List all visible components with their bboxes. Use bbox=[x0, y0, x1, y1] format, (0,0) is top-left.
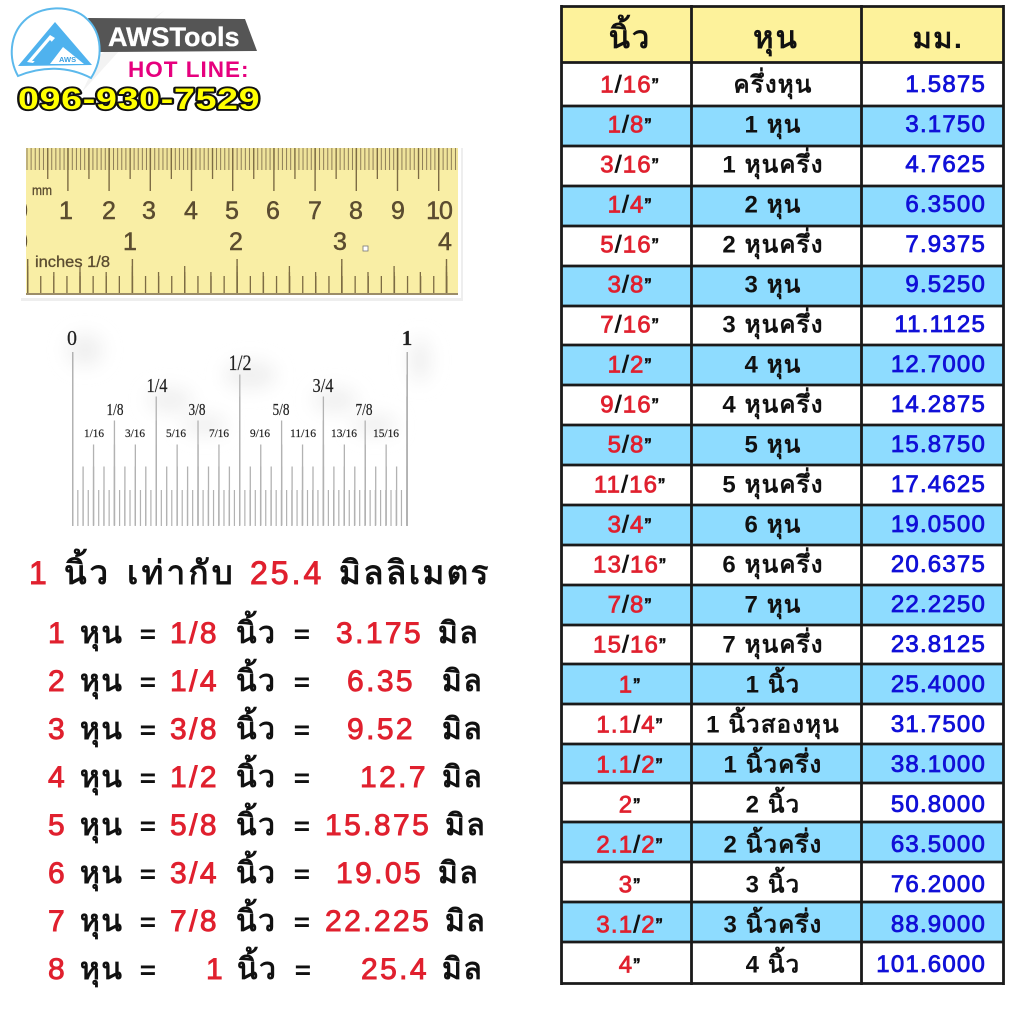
conversion: 7 hun: นิ้ว bbox=[236, 898, 277, 938]
row 7/16: 3 หุนครึ่ง bbox=[722, 306, 824, 340]
row 3 inch: 3 นิ้ว bbox=[746, 866, 800, 898]
conversion: 4 hun: มิล bbox=[442, 761, 483, 794]
row 5/8 bbox=[608, 431, 986, 460]
row 13/16: 13/16” bbox=[593, 552, 667, 578]
conversion: 6 hun bbox=[48, 850, 479, 892]
conversion: 8 hun: นิ้ว bbox=[237, 946, 278, 986]
fraction labels: 3/8 bbox=[188, 400, 206, 419]
row 1/8: 1/8” bbox=[608, 112, 652, 138]
row 7/8: 7/8” bbox=[608, 592, 652, 618]
row 11/16 bbox=[594, 466, 986, 500]
row 2 inch: 2” bbox=[619, 792, 641, 818]
row 15/16: 23.8125 bbox=[891, 631, 986, 658]
logo triangle mark bbox=[18, 22, 92, 66]
row 2.1/2: 2.1/2” bbox=[596, 832, 664, 858]
conversion: 3 hun: 3/8 bbox=[170, 713, 219, 746]
row 3/4: 6 หุน bbox=[744, 512, 802, 540]
heading: one inch equals 25.4 mm: นิ้ว bbox=[64, 548, 111, 591]
64th ticks bbox=[72, 490, 408, 526]
row 3/16: 3/16” bbox=[600, 152, 660, 178]
row 13/16: 6 หุนครึ่ง bbox=[722, 546, 824, 580]
conversion table bbox=[561, 5, 1004, 985]
inch numbers: 0 bbox=[14, 228, 28, 256]
row 3.1/2 bbox=[596, 906, 986, 938]
row 7/8 bbox=[608, 591, 986, 620]
inch numbers: 4 bbox=[438, 228, 452, 256]
conversion: 8 hun bbox=[48, 946, 483, 988]
row 3 inch: 76.2000 bbox=[891, 871, 986, 898]
conversion: 4 hun: = bbox=[294, 763, 310, 793]
logo bbox=[12, 8, 260, 116]
conversion: 1 hun: มิล bbox=[438, 617, 479, 650]
row 1/16: 1/16” bbox=[600, 72, 660, 98]
row 5/8: 5/8” bbox=[608, 432, 652, 458]
row 3/16 bbox=[600, 146, 986, 180]
conversion: 7 hun: 7/8 bbox=[170, 905, 219, 938]
conversion: 4 hun: 4 bbox=[48, 761, 67, 794]
conversion: 2 hun: = bbox=[294, 667, 310, 697]
row 7/16: 7/16” bbox=[600, 312, 660, 338]
conversion: 5 hun: นิ้ว bbox=[236, 802, 277, 842]
conversion: 6 hun: 19.05 bbox=[336, 857, 423, 890]
row 5/16 bbox=[600, 226, 986, 260]
row 5/8: 5 หุน bbox=[744, 432, 802, 460]
row 3/4 bbox=[608, 511, 986, 540]
row 1/2 bbox=[608, 351, 986, 380]
row 1/2: 1/2” bbox=[608, 352, 652, 378]
conversion: 4 hun: หุน bbox=[80, 761, 123, 796]
table header: มม. bbox=[913, 23, 963, 55]
whole inch ticks bbox=[72, 352, 408, 526]
metric and inch ruler photo bbox=[14, 148, 463, 301]
32nd ticks bbox=[72, 466, 408, 526]
logo banner bbox=[88, 18, 257, 52]
row 3 inch bbox=[619, 866, 986, 898]
heading: one inch equals 25.4 mm: มิลลิเมตร bbox=[339, 554, 491, 591]
fraction labels: 5/8 bbox=[272, 400, 290, 419]
quarter ticks bbox=[72, 396, 408, 526]
row 7/8: 7 หุน bbox=[744, 592, 802, 620]
hot line label: HOT LINE: bbox=[128, 57, 250, 82]
row 15/16: 15/16” bbox=[593, 632, 667, 658]
heading: one inch equals 25.4 mm bbox=[29, 548, 491, 591]
table header: หุน bbox=[753, 20, 799, 57]
conversion: 4 hun: = bbox=[140, 763, 156, 793]
conversion: 8 hun: มิล bbox=[442, 953, 483, 986]
row 13/16 bbox=[593, 546, 986, 580]
conversion: 1 hun: หุน bbox=[80, 617, 123, 652]
row 5/16: 7.9375 bbox=[905, 231, 986, 258]
row 9/16: 4 หุนครึ่ง bbox=[722, 386, 824, 420]
heading: one inch equals 25.4 mm: 25.4 bbox=[250, 555, 324, 591]
conversion: 6 hun: นิ้ว bbox=[236, 850, 277, 890]
conversion: 2 hun: 2 bbox=[48, 665, 67, 698]
conversion: 8 hun: หุน bbox=[80, 953, 123, 988]
mm label: mm bbox=[32, 182, 52, 198]
row 7/16 bbox=[600, 306, 986, 340]
row 3/8 bbox=[608, 271, 986, 300]
row 1/4 bbox=[608, 191, 986, 220]
heading: one inch equals 25.4 mm: 1 bbox=[29, 555, 50, 591]
conversion: 3 hun: = bbox=[140, 715, 156, 745]
conversion list bbox=[48, 610, 486, 988]
conversion: 5 hun: หุน bbox=[80, 809, 123, 844]
inch ticks bbox=[40, 276, 448, 293]
row 1/2: 12.7000 bbox=[891, 351, 986, 378]
logo triangle mark: AWS bbox=[59, 55, 76, 64]
row 1.1/2 bbox=[596, 746, 986, 778]
row 15/16: 7 หุนครึ่ง bbox=[722, 626, 824, 660]
conversion: 1 hun: = bbox=[140, 619, 156, 649]
row 1/2: 4 หุน bbox=[744, 352, 802, 380]
row 3.1/2: 3.1/2” bbox=[596, 912, 664, 938]
row 7/16: 11.1125 bbox=[894, 311, 986, 338]
row 2.1/2: 63.5000 bbox=[891, 831, 986, 858]
conversion: 2 hun bbox=[48, 658, 483, 700]
row 9/16: 9/16” bbox=[600, 392, 660, 418]
conversion: 7 hun bbox=[48, 898, 486, 940]
conversion: 3 hun bbox=[48, 706, 483, 748]
conversion: 7 hun: = bbox=[140, 907, 156, 937]
row 2.1/2: 2 นิ้วครึ่ง bbox=[724, 826, 822, 858]
fraction labels: 7/8 bbox=[356, 400, 372, 419]
row 5/8: 15.8750 bbox=[891, 431, 986, 458]
heading: one inch equals 25.4 mm: เท่ากับ bbox=[127, 554, 236, 591]
conversion: 8 hun: 1 bbox=[206, 953, 225, 986]
row 3.1/2: 88.9000 bbox=[891, 911, 986, 938]
conversion: 3 hun: นิ้ว bbox=[236, 706, 277, 746]
centimetre numbers: 6 bbox=[266, 197, 280, 225]
conversion: 8 hun: = bbox=[295, 955, 311, 985]
row 3/8: 3 หุน bbox=[744, 272, 802, 300]
conversion: 2 hun: = bbox=[140, 667, 156, 697]
inch numbers: 2 bbox=[229, 228, 243, 256]
conversion: 5 hun: มิล bbox=[445, 809, 486, 842]
centimetre numbers: 10 bbox=[426, 197, 452, 225]
fraction labels: 11/16 bbox=[290, 426, 316, 440]
conversion: 7 hun: 7 bbox=[48, 905, 67, 938]
row 1.1/4: 31.7500 bbox=[891, 711, 986, 738]
row 3 inch: 3” bbox=[619, 872, 641, 898]
fraction labels: 13/16 bbox=[331, 426, 357, 440]
half ticks bbox=[72, 374, 408, 526]
centimetre numbers: 1 bbox=[59, 197, 73, 225]
conversion: 6 hun: มิล bbox=[438, 857, 479, 890]
row 1.1/4 bbox=[596, 706, 986, 740]
inch numbers: 3 bbox=[333, 228, 347, 256]
logo badge bbox=[12, 8, 100, 78]
phone number: 096-930-7529 bbox=[18, 83, 260, 116]
centimetre numbers: 3 bbox=[142, 197, 156, 225]
row 1.1/2: 1.1/2” bbox=[596, 752, 664, 778]
table backgrounds bbox=[561, 6, 1004, 984]
centimetre numbers: 8 bbox=[349, 197, 363, 225]
row 1 inch: 1” bbox=[619, 672, 641, 698]
row 1/4: 6.3500 bbox=[905, 191, 986, 218]
conversion: 1 hun: 1 bbox=[48, 617, 67, 650]
row 1 inch bbox=[619, 666, 986, 698]
conversion: 3 hun: = bbox=[294, 715, 310, 745]
conversion: 5 hun: 5/8 bbox=[170, 809, 219, 842]
conversion: 6 hun: = bbox=[294, 859, 310, 889]
row 11/16: 11/16” bbox=[594, 472, 666, 498]
fraction labels bbox=[67, 326, 412, 440]
row 1.1/2: 38.1000 bbox=[891, 751, 986, 778]
fraction labels: 7/16 bbox=[209, 426, 229, 440]
conversion: 6 hun: 6 bbox=[48, 857, 67, 890]
fraction labels: 15/16 bbox=[373, 426, 399, 440]
fraction labels: 9/16 bbox=[250, 426, 270, 440]
conversion: 7 hun: = bbox=[294, 907, 310, 937]
conversion: 8 hun: 8 bbox=[48, 953, 67, 986]
fraction labels: 1/2 bbox=[228, 350, 252, 375]
conversion: 2 hun: หุน bbox=[80, 665, 123, 700]
row 1 inch: 25.4000 bbox=[891, 671, 986, 698]
row 1.1/2: 1 นิ้วครึ่ง bbox=[724, 746, 822, 778]
fraction labels: 3/16 bbox=[125, 426, 145, 440]
row 15/16 bbox=[593, 626, 986, 660]
row 13/16: 20.6375 bbox=[891, 551, 986, 578]
conversion: 4 hun: 12.7 bbox=[360, 761, 428, 794]
centimetre numbers: 7 bbox=[308, 197, 322, 225]
row 2.1/2 bbox=[596, 826, 986, 858]
centimetre numbers bbox=[26, 201, 452, 220]
table header bbox=[609, 14, 963, 57]
conversion: 6 hun: = bbox=[140, 859, 156, 889]
row 4 inch: 4” bbox=[619, 952, 641, 978]
fraction labels: 1/16 bbox=[84, 426, 104, 440]
millimetre ticks bbox=[26, 148, 458, 170]
row 1/4: 1/4” bbox=[608, 192, 652, 218]
table header: นิ้ว bbox=[609, 14, 651, 55]
row 1 inch: 1 นิ้ว bbox=[746, 666, 800, 698]
conversion: 1 hun: 3.175 bbox=[336, 617, 423, 650]
centimetre numbers: 5 bbox=[225, 197, 239, 225]
row 1.1/4: 1.1/4” bbox=[596, 712, 664, 738]
row 4 inch bbox=[619, 946, 986, 978]
centimetre numbers: 0 bbox=[14, 197, 28, 225]
row 4 inch: 4 นิ้ว bbox=[746, 946, 800, 978]
conversion: 2 hun: นิ้ว bbox=[236, 658, 277, 698]
centimetre numbers: 4 bbox=[184, 197, 198, 225]
8th ticks bbox=[72, 420, 408, 526]
conversion: 1 hun bbox=[48, 610, 479, 652]
row 1.1/4: 1 นิ้วสองหุน bbox=[706, 706, 840, 740]
fraction labels: 0 bbox=[67, 326, 77, 350]
conversion: 6 hun: หุน bbox=[80, 857, 123, 892]
row 3/8: 9.5250 bbox=[905, 271, 986, 298]
16th ticks bbox=[72, 444, 408, 526]
row 11/16: 17.4625 bbox=[891, 471, 986, 498]
conversion: 4 hun bbox=[48, 754, 483, 796]
conversion: 3 hun: มิล bbox=[442, 713, 483, 746]
conversion: 5 hun: 15.875 bbox=[325, 809, 431, 842]
row 3/16: 4.7625 bbox=[905, 151, 986, 178]
conversion: 3 hun: หุน bbox=[80, 713, 123, 748]
conversion: 6 hun: 3/4 bbox=[170, 857, 219, 890]
conversion: 2 hun: 1/4 bbox=[170, 665, 219, 698]
row 4 inch: 101.6000 bbox=[876, 951, 986, 978]
inches label: inches 1/8 bbox=[35, 254, 110, 271]
row 1/4: 2 หุน bbox=[744, 192, 802, 220]
conversion: 8 hun: = bbox=[140, 955, 156, 985]
fraction labels: 5/16 bbox=[166, 426, 186, 440]
row 1/16: ครึ่งหุน bbox=[734, 66, 812, 100]
row 5/16: 2 หุนครึ่ง bbox=[722, 226, 824, 260]
conversion: 7 hun: มิล bbox=[445, 905, 486, 938]
conversion: 1 hun: นิ้ว bbox=[236, 610, 277, 650]
fraction labels: 1/4 bbox=[146, 375, 168, 397]
conversion: 1 hun: = bbox=[294, 619, 310, 649]
row 3.1/2: 3 นิ้วครึ่ง bbox=[724, 906, 822, 938]
row 3/16: 1 หุนครึ่ง bbox=[722, 146, 824, 180]
centimetre numbers: 9 bbox=[391, 197, 405, 225]
row 1/8 bbox=[608, 111, 986, 140]
conversion: 7 hun: 22.225 bbox=[325, 905, 431, 938]
row 2 inch bbox=[619, 786, 986, 818]
row 3/4: 19.0500 bbox=[891, 511, 986, 538]
conversion: 1 hun: 1/8 bbox=[170, 617, 219, 650]
conversion: 7 hun: หุน bbox=[80, 905, 123, 940]
conversion: 5 hun: = bbox=[140, 811, 156, 841]
row 1/8: 1 หุน bbox=[744, 112, 802, 140]
row 11/16: 5 หุนครึ่ง bbox=[722, 466, 824, 500]
fractional inch ruler diagram bbox=[67, 326, 430, 508]
fraction labels: 1/8 bbox=[106, 400, 124, 419]
row 9/16: 14.2875 bbox=[891, 391, 986, 418]
fraction labels: 3/4 bbox=[312, 375, 334, 397]
row 3/4: 3/4” bbox=[608, 512, 652, 538]
conversion: 4 hun: 1/2 bbox=[170, 761, 219, 794]
brand name: AWSTools bbox=[108, 22, 240, 52]
conversion: 3 hun: 3 bbox=[48, 713, 67, 746]
table grid bbox=[561, 5, 1004, 985]
conversion: 8 hun: 25.4 bbox=[361, 953, 429, 986]
row 1/16: 1.5875 bbox=[905, 71, 986, 98]
centimetre numbers: 2 bbox=[102, 197, 116, 225]
row 1/8: 3.1750 bbox=[905, 111, 986, 138]
inch numbers bbox=[26, 232, 452, 250]
conversion: 5 hun: 5 bbox=[48, 809, 67, 842]
fraction labels: 1 bbox=[402, 326, 412, 350]
conversion: 2 hun: 6.35 bbox=[347, 665, 415, 698]
conversion: 3 hun: 9.52 bbox=[347, 713, 415, 746]
row 9/16 bbox=[600, 386, 986, 420]
conversion: 4 hun: นิ้ว bbox=[236, 754, 277, 794]
conversion: 2 hun: มิล bbox=[442, 665, 483, 698]
row 2 inch: 2 นิ้ว bbox=[746, 786, 800, 818]
conversion: 5 hun: = bbox=[294, 811, 310, 841]
row 2 inch: 50.8000 bbox=[891, 791, 986, 818]
row 3/8: 3/8” bbox=[608, 272, 652, 298]
row 7/8: 22.2250 bbox=[891, 591, 986, 618]
inch numbers: 1 bbox=[123, 228, 137, 256]
row 1/16 bbox=[600, 66, 986, 100]
conversion: 5 hun bbox=[48, 802, 486, 844]
row 5/16: 5/16” bbox=[600, 232, 660, 258]
